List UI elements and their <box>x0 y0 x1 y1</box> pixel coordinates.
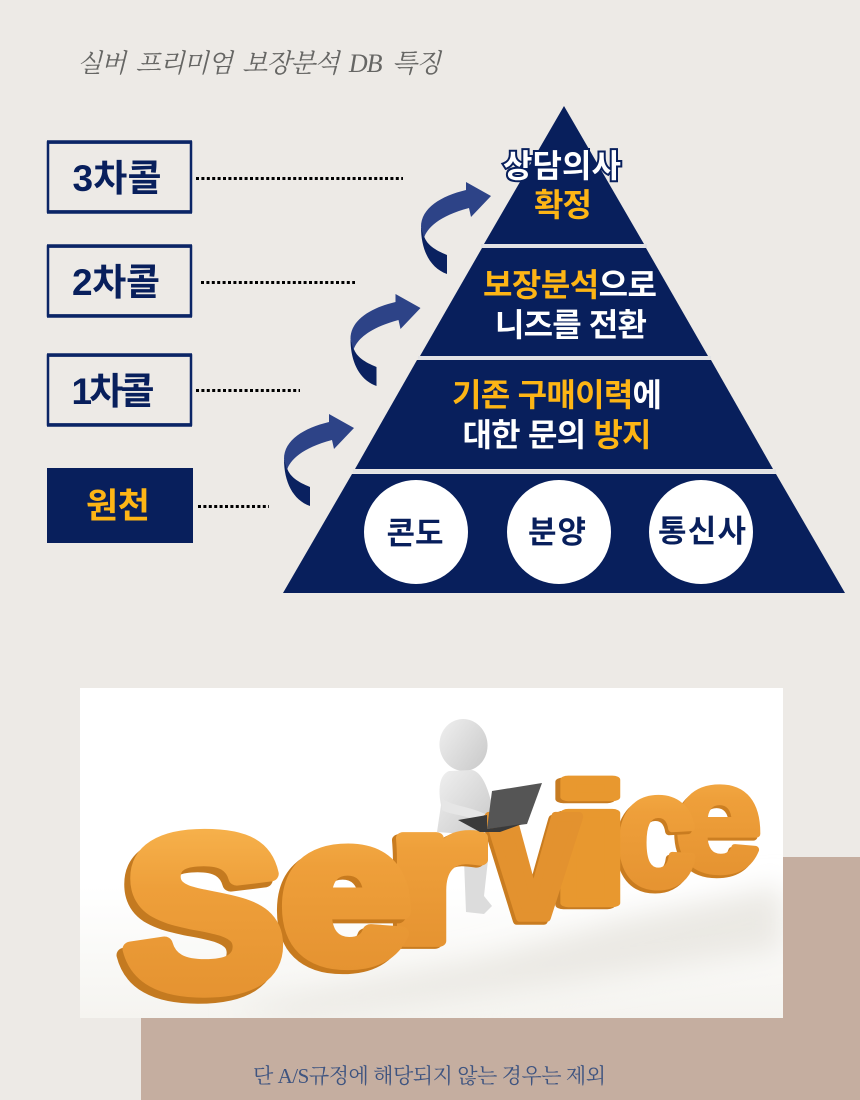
letter e2: e <box>675 733 762 903</box>
source box <box>47 468 193 543</box>
arrow: to top tier <box>421 182 491 274</box>
circle: condo: 콘도 <box>386 516 444 551</box>
pyramid tier 4: confirmed consult: 상담의사 <box>503 148 621 184</box>
pyramid tier 2: prevent inquiries: 대한 문의 방지 <box>462 417 652 453</box>
letter e1 <box>276 844 405 974</box>
2nd call box <box>47 246 192 316</box>
pyramid tier 4: confirmed consult <box>484 106 644 244</box>
arrow: to second tier <box>284 414 354 506</box>
letter c <box>620 794 693 894</box>
2nd call dotted connector <box>201 281 355 284</box>
3rd call dotted connector <box>196 177 403 180</box>
3rd call box <box>47 142 192 212</box>
letter r: r <box>383 766 480 985</box>
arrow: to third tier <box>350 294 420 386</box>
title: 실버 프리미엄 보장분석 DB 특징 <box>77 49 443 78</box>
letter e2: e <box>672 736 759 906</box>
pyramid tier 4: confirmed consult: 확정 <box>534 187 592 223</box>
footnote: 단 A/S규정에 해당되지 않는 경우는 제외 <box>253 1064 606 1088</box>
letter r: r <box>387 764 484 983</box>
letter e2 <box>674 784 760 878</box>
pyramid tier 3: needs conversion: 니즈를 전환 <box>495 307 647 343</box>
1st call box: 1차콜 <box>72 371 154 412</box>
tier divider lines <box>353 246 776 472</box>
source box: 원천 <box>86 487 150 526</box>
2nd call box: 2차콜 <box>72 262 160 303</box>
letter c: c <box>617 741 696 920</box>
pyramid tier 1: sources <box>283 474 845 593</box>
1st call dotted connector <box>196 389 300 392</box>
pyramid tier 3: needs conversion: 보장분석으로 <box>483 267 657 303</box>
circle: telecom: 통신사 <box>658 514 746 549</box>
circle: telecom <box>649 480 753 584</box>
pyramid tier 2: prevent inquiries <box>355 360 773 469</box>
letter c: c <box>614 744 693 923</box>
circle: presale: 분양 <box>528 515 586 550</box>
letter e1: e <box>281 775 411 1005</box>
circle: condo <box>364 480 468 584</box>
letter i <box>555 776 620 910</box>
person <box>436 716 492 914</box>
letter v: v <box>485 748 577 961</box>
letter i: i <box>546 750 635 939</box>
taupe backdrop panel <box>141 857 860 1100</box>
source dotted connector <box>198 505 269 508</box>
letter v: v <box>488 745 580 958</box>
pyramid tier 2: prevent inquiries: 기존 구매이력에 <box>452 377 662 413</box>
pyramid tier 3: needs conversion <box>420 248 708 356</box>
ground shadow <box>317 883 783 1006</box>
illustration: service <box>80 688 783 1040</box>
1st call box <box>47 355 192 425</box>
panel: call stages <box>47 142 403 543</box>
laptop <box>458 783 542 832</box>
letter e1: e <box>276 779 406 1009</box>
3rd call box: 3차콜 <box>72 158 162 199</box>
circle: presale <box>507 480 611 584</box>
letter i: i <box>541 752 630 941</box>
letter v <box>483 812 560 925</box>
letter r <box>392 830 488 949</box>
letter S: S <box>124 793 284 1034</box>
letter S: S <box>118 799 278 1040</box>
pyramid <box>283 106 845 593</box>
